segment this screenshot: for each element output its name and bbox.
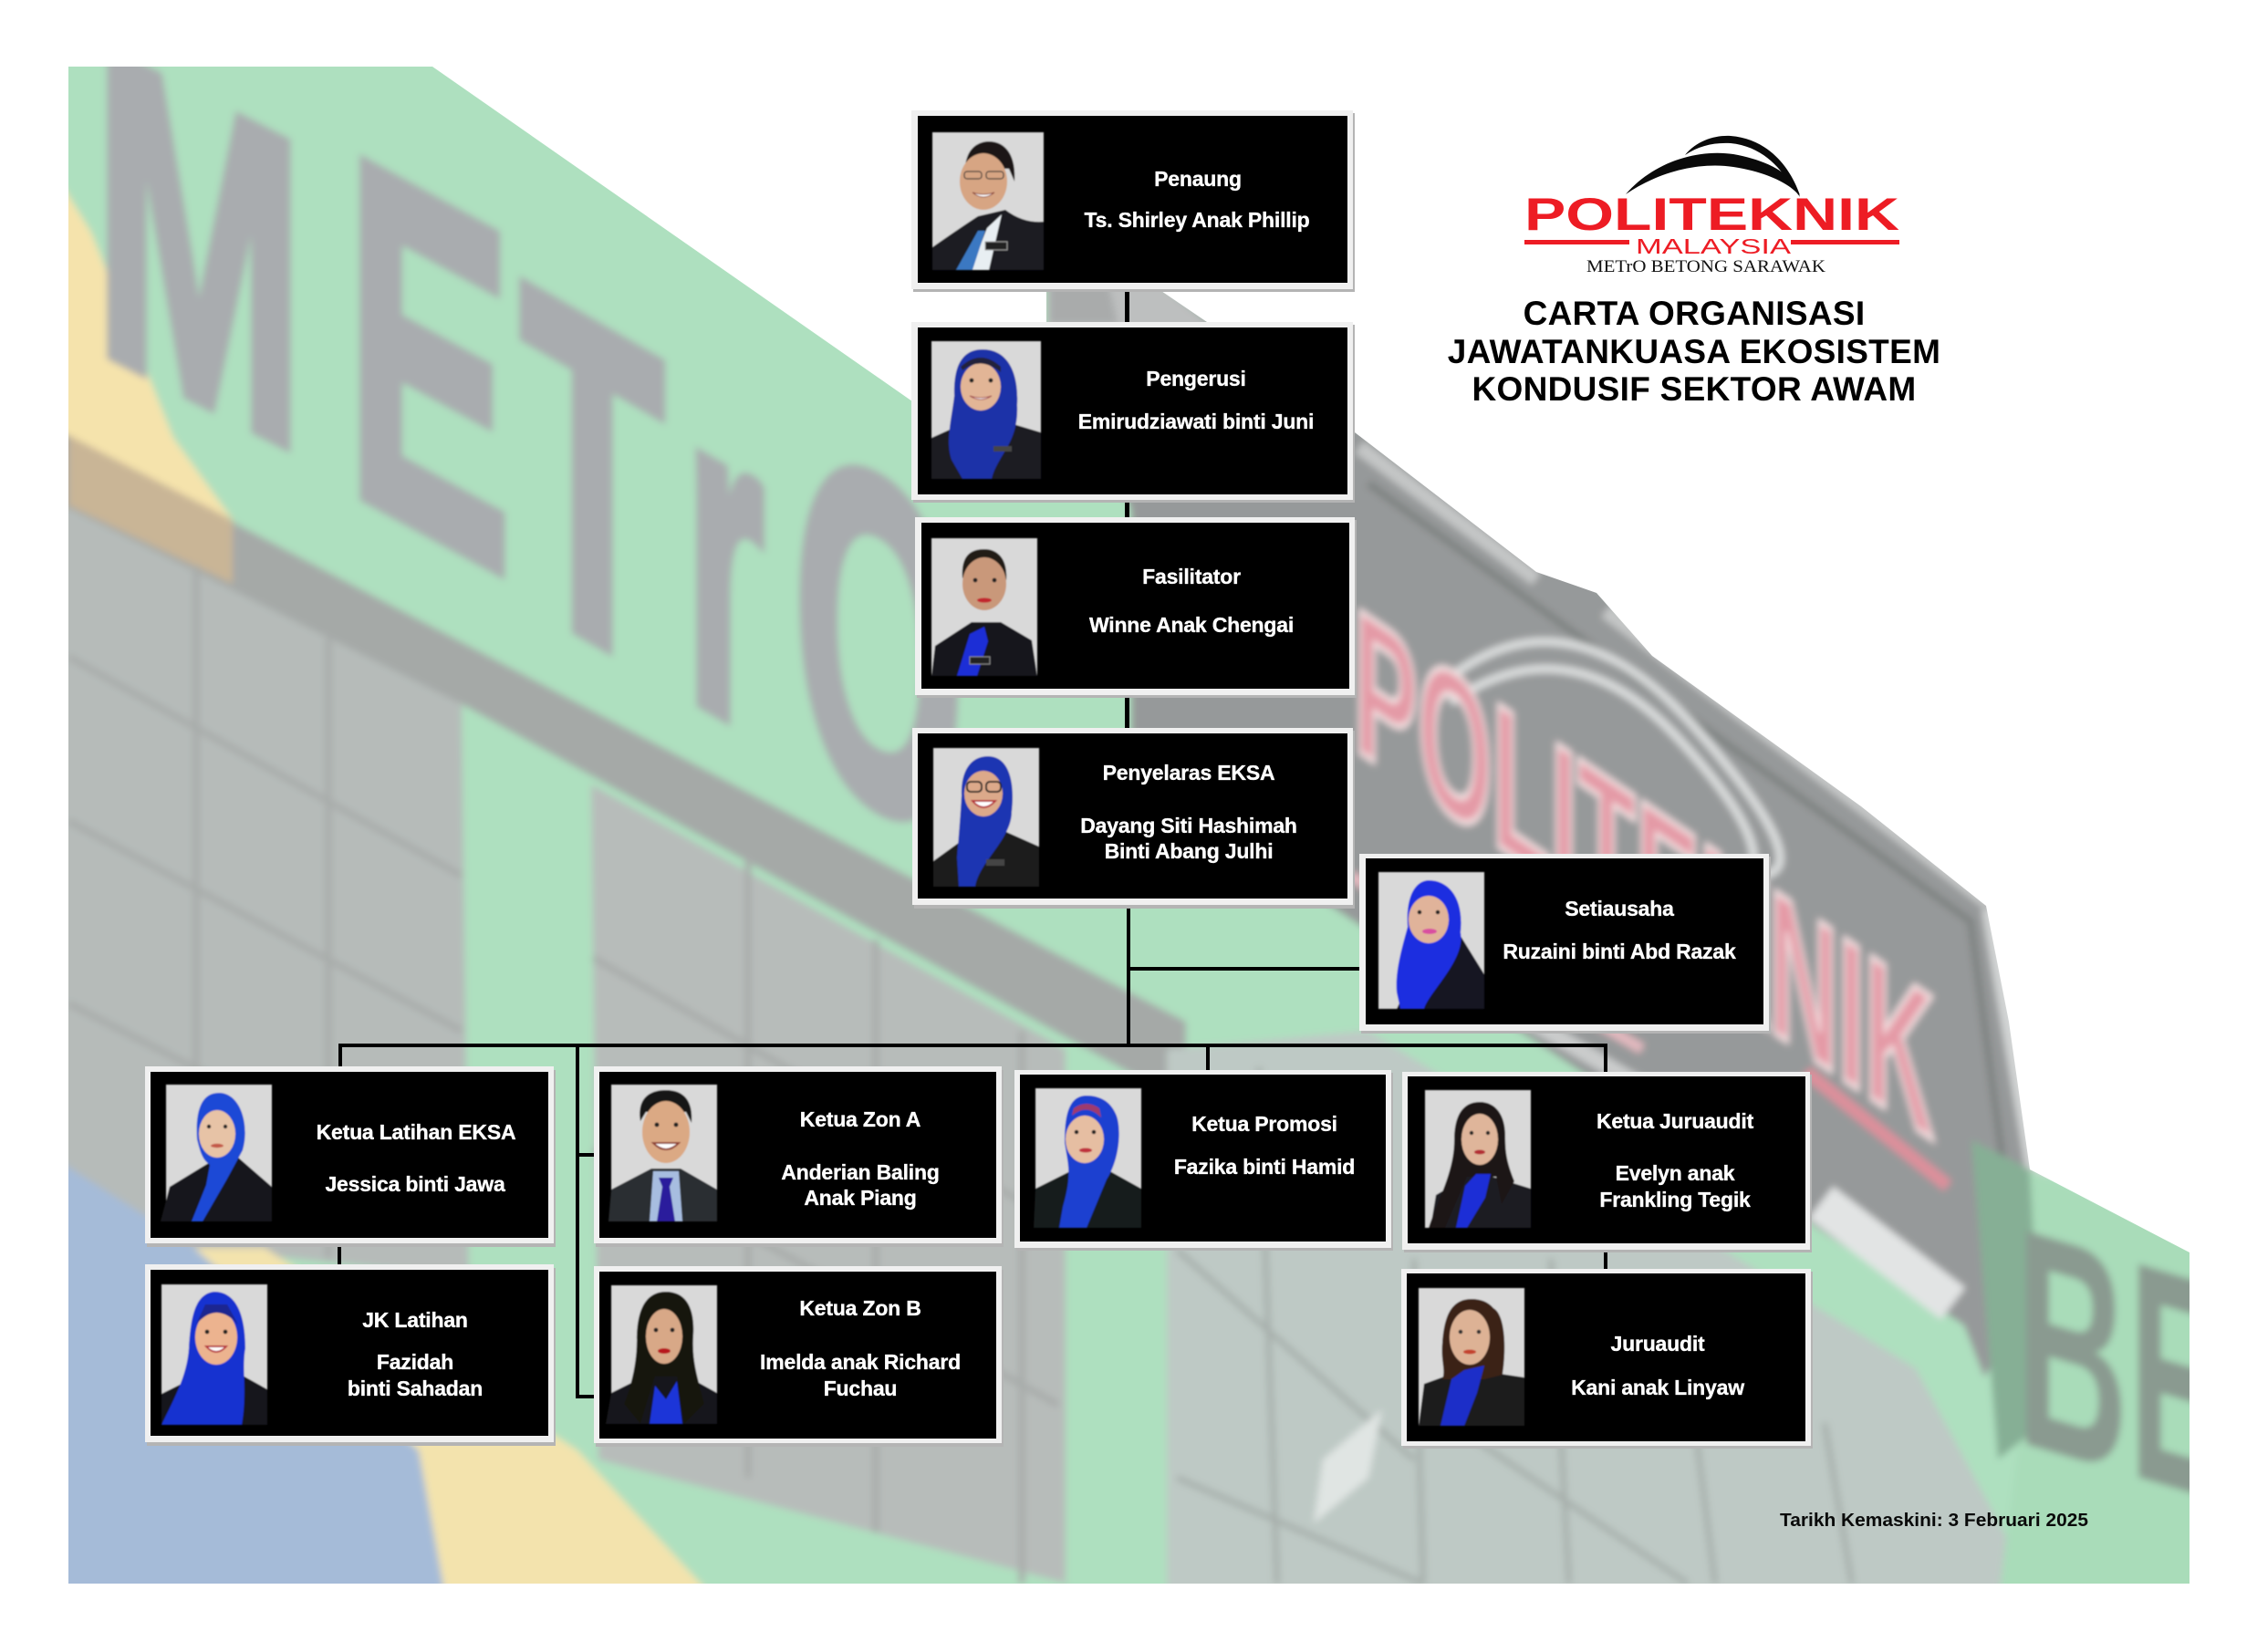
text: Setiausaha (1503, 897, 1736, 963)
background photo: faded METrO building: BE (2016, 1162, 2231, 1571)
card: Pengerusi (911, 322, 1355, 503)
text: Penaung (1084, 167, 1310, 232)
text: Fasilitator: Winne Anak Chengai (1089, 613, 1294, 637)
text: Juruaudit: Kani anak Linyaw (1571, 1376, 1744, 1399)
text: Penyelaras EKSA: Binti Abang Julhi (1105, 839, 1273, 863)
update date note: Tarikh Kemaskini: 3 Februari 2025 (1780, 1511, 2088, 1531)
photo: Winne Chengai (931, 538, 1037, 676)
text: Penaung: Ts. Shirley Anak Phillip (1084, 208, 1310, 232)
card: Ketua Latihan EKSA (145, 1066, 556, 1247)
text: Ketua Promosi (1174, 1112, 1355, 1179)
text: Pengerusi: Pengerusi (1146, 367, 1246, 390)
text: Juruaudit (1571, 1332, 1744, 1399)
text: Ketua Zon A: Anak Piang (804, 1186, 917, 1210)
card: Setiausaha (1359, 854, 1771, 1034)
card: Penyelaras EKSA (912, 728, 1355, 909)
logo: Politeknik Malaysia METrO Betong Sarawak: METrO BETONG SARAWAK (1586, 257, 1825, 276)
text: Ketua Promosi: Ketua Promosi (1191, 1112, 1337, 1136)
card: JK Latihan (145, 1264, 556, 1446)
text: Ketua Juruaudit (1597, 1109, 1754, 1211)
text: Juruaudit: Juruaudit (1611, 1332, 1705, 1356)
photo: Ruzaini (1378, 872, 1484, 1009)
background photo: faded METrO building: POLITEKNIK (1354, 563, 1934, 1184)
text: Ketua Zon A (781, 1107, 940, 1210)
logo: Politeknik Malaysia METrO Betong Sarawak: MALAYSIA (1636, 234, 1792, 258)
text: Ketua Latihan EKSA: Jessica binti Jawa (325, 1172, 505, 1196)
logo: Politeknik Malaysia METrO Betong Sarawak (1524, 136, 1899, 276)
card: Penaung (911, 110, 1355, 292)
card: Juruaudit (1401, 1269, 1813, 1449)
photo: Fazika (1034, 1088, 1141, 1228)
photo: Imelda (606, 1285, 717, 1424)
text: Ketua Juruaudit: Frankling Tegik (1599, 1188, 1751, 1211)
text: Pengerusi: Emirudziawati binti Juni (1078, 410, 1314, 433)
text: Ketua Zon B (760, 1296, 961, 1400)
text: Ketua Zon A: Ketua Zon A (800, 1107, 920, 1131)
card: Ketua Juruaudit (1402, 1072, 1812, 1252)
text: Ketua Promosi: Fazika binti Hamid (1174, 1155, 1355, 1179)
text: Fasilitator: Fasilitator (1142, 565, 1241, 588)
photo: Dayang Siti Hashimah (933, 748, 1039, 887)
text: Pengerusi (1078, 367, 1314, 433)
text: Ketua Zon A: Anderian Baling (781, 1160, 940, 1184)
text: JK Latihan: Fazidah (377, 1350, 453, 1374)
card: Ketua Zon A (594, 1066, 1004, 1247)
text: Ketua Latihan EKSA: Ketua Latihan EKSA (317, 1120, 515, 1144)
photo: Evelyn Tegik (1425, 1090, 1531, 1228)
card: Fasilitator (915, 517, 1357, 698)
title: JAWATANKUASA EKOSISTEM (1448, 333, 1940, 370)
title: KONDUSIF SEKTOR AWAM (1472, 370, 1917, 408)
photo: Shirley Phillip (932, 132, 1044, 270)
card: Ketua Promosi (1014, 1070, 1393, 1251)
background photo: faded METrO building: E (347, 49, 511, 679)
text: Penyelaras EKSA: Dayang Siti Hashimah (1080, 814, 1297, 837)
text: Ketua Juruaudit: Evelyn anak (1616, 1161, 1735, 1185)
text: Penaung: Penaung (1154, 167, 1242, 191)
text: Setiausaha: Setiausaha (1565, 897, 1674, 920)
title: CARTA ORGANISASI (1524, 295, 1865, 332)
photo: Fazidah (161, 1284, 267, 1425)
text: Setiausaha: Ruzaini binti Abd Razak (1503, 940, 1736, 963)
photo: Emirudziawati (931, 341, 1041, 479)
text: Penyelaras EKSA: Penyelaras EKSA (1103, 761, 1274, 784)
logo: Politeknik Malaysia METrO Betong Sarawak: POLITEKNIK (1524, 189, 1899, 240)
title (1448, 295, 1940, 408)
text: Ketua Latihan EKSA (317, 1120, 515, 1196)
text: JK Latihan (348, 1308, 483, 1400)
text: Ketua Zon B: Imelda anak Richard (760, 1350, 961, 1374)
text: Penyelaras EKSA (1080, 761, 1297, 863)
text: Ketua Zon B: Ketua Zon B (799, 1296, 921, 1320)
text: Ketua Zon B: Fuchau (824, 1377, 897, 1400)
photo: Anderian (608, 1085, 717, 1221)
connector lines (338, 289, 1607, 1398)
background photo: faded METrO building: r (685, 272, 764, 838)
background photo: faded METrO building: T (520, 185, 664, 777)
text: Ketua Juruaudit: Ketua Juruaudit (1597, 1109, 1754, 1133)
text: Fasilitator (1089, 565, 1294, 637)
card: Ketua Zon B (594, 1266, 1004, 1447)
photo: Kani Linyaw (1419, 1288, 1524, 1426)
text: JK Latihan: JK Latihan (362, 1308, 468, 1332)
photo: Jessica (161, 1085, 272, 1221)
background photo: faded METrO building: O (794, 336, 964, 950)
text: JK Latihan: binti Sahadan (348, 1377, 483, 1400)
